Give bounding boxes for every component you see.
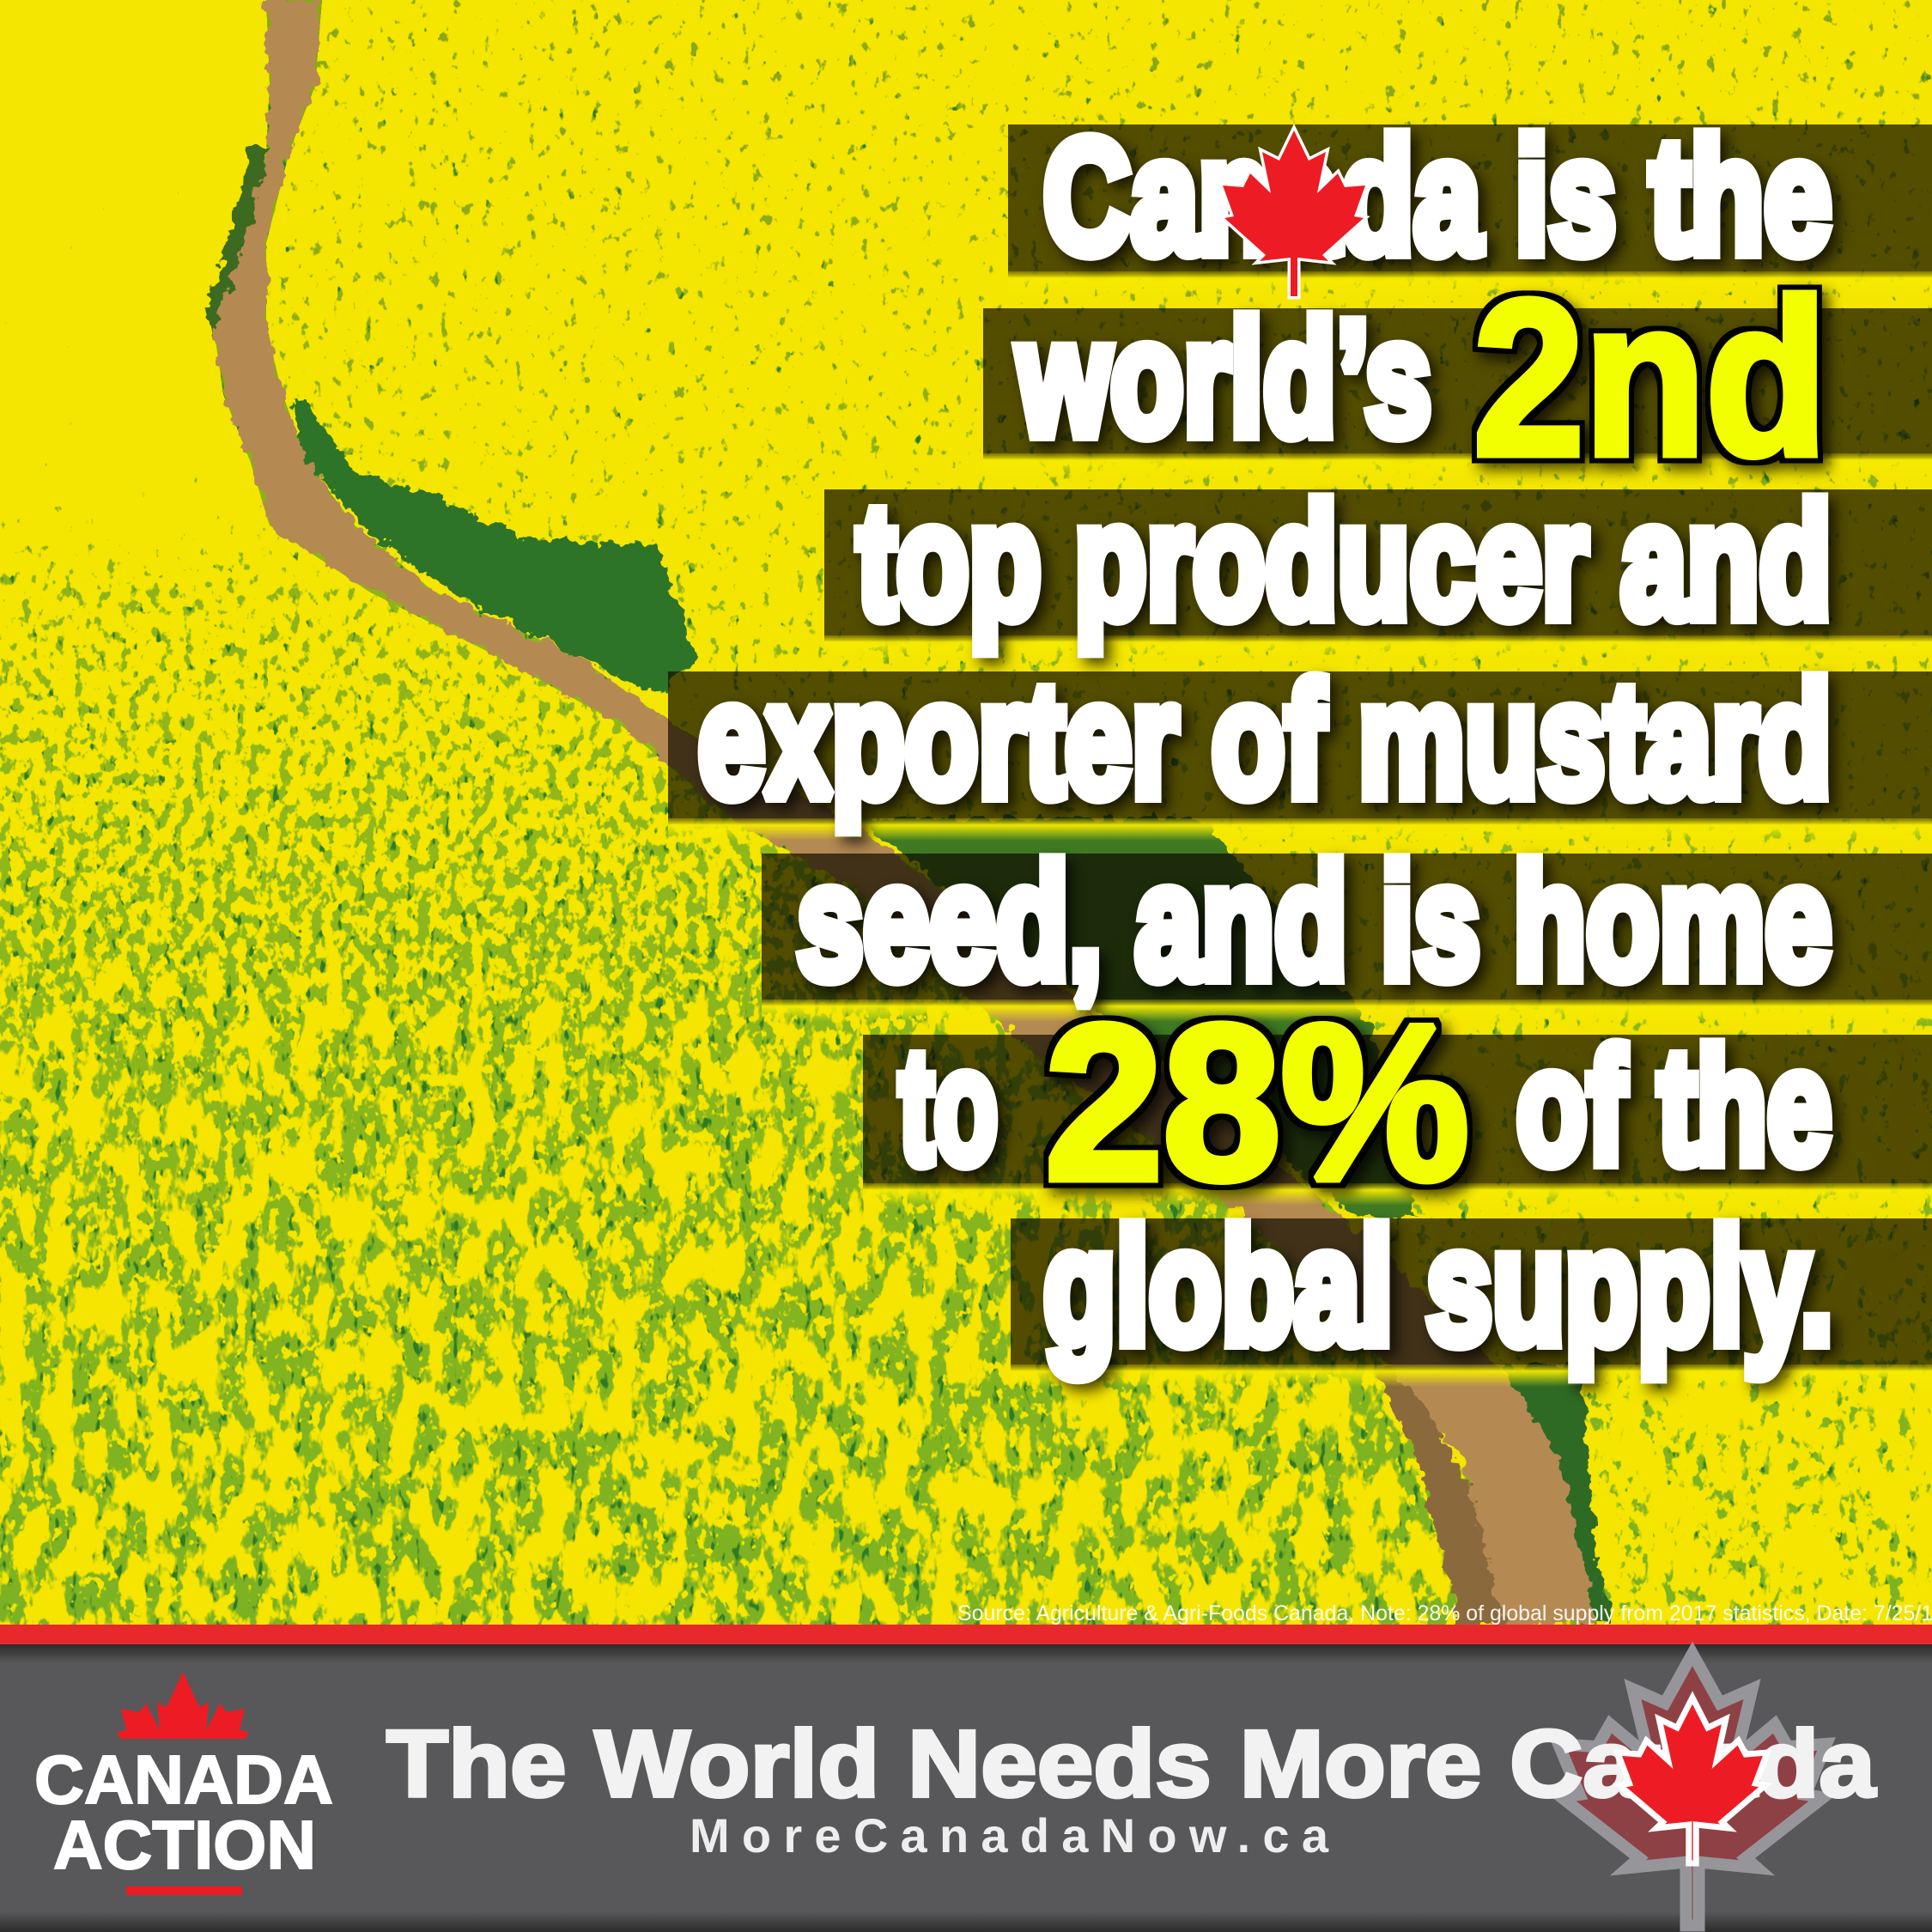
icon: maple leaf in headline <box>1223 131 1365 296</box>
headline text <box>698 106 1833 1378</box>
red divider band <box>0 1625 1932 1644</box>
footer panel <box>0 1644 1932 1932</box>
logo wordmark: ACTION <box>53 1807 316 1883</box>
headline text: to <box>899 1016 998 1198</box>
logo: Canada Action <box>34 1672 333 1895</box>
source note: Source: Agriculture & Agri-Foods Canada, Note: 28% of global supply from 2017 statistics, Date: 7/25/19 <box>957 1601 1932 1625</box>
highlight: 28%: 28% <box>1045 978 1469 1226</box>
icon: red maple leaf over slogan <box>1618 1698 1767 1863</box>
headline text: world’s <box>1017 288 1431 470</box>
text backing bars <box>668 125 1932 1387</box>
logo wordmark <box>34 1741 333 1883</box>
website url: MoreCanadaNow.ca <box>690 1808 1329 1862</box>
icon: large translucent maple leaf <box>1558 1654 1826 1926</box>
logo underline <box>126 1886 242 1895</box>
highlight: 2nd: 2nd <box>1473 253 1827 501</box>
logo wordmark: CANADA <box>34 1741 333 1818</box>
logo leaf <box>117 1672 249 1739</box>
slogan: The World Needs More Canada <box>386 1711 1876 1817</box>
